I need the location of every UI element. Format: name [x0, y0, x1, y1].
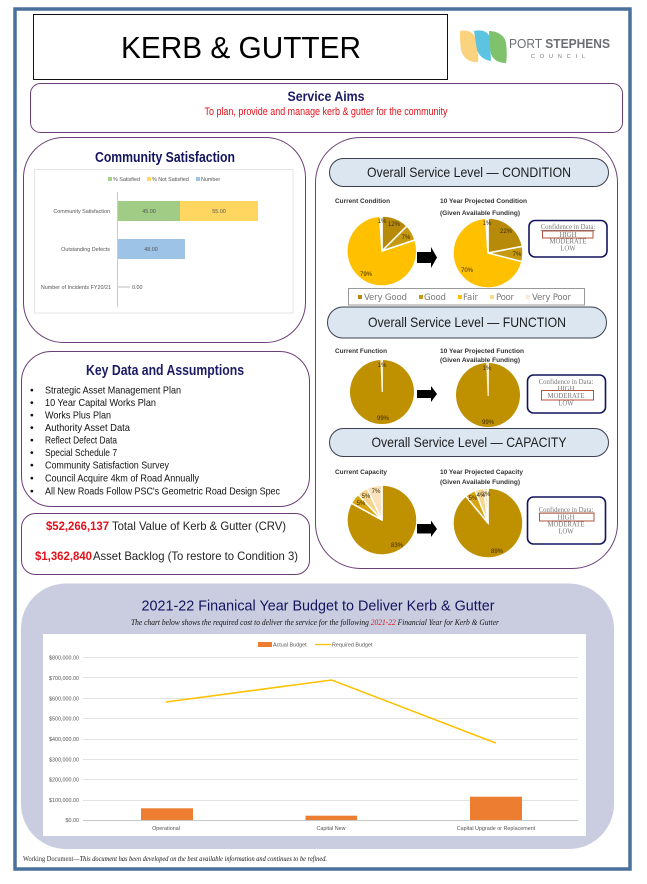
chart: actual vs required budget: $200,000.00 — [49, 778, 79, 784]
heading: condition: Overall Service Level — CONDITION — [367, 164, 571, 180]
callout: confidence in data, capacity: HIGH — [558, 514, 575, 522]
callout: confidence in data, function: MODERATE — [547, 393, 585, 400]
list: key data items: Reflect Defect Data — [45, 434, 117, 446]
callout: confidence in data, function: LOW — [558, 400, 574, 408]
pie chart: current condition: Current Condition — [335, 198, 390, 205]
chart: actual vs required budget: Capital Upgrade or Replacement — [457, 826, 536, 832]
pie chart: projected capacity: 89% — [491, 549, 504, 555]
pie chart: current function: Current Function — [335, 348, 387, 355]
callout: confidence in data, capacity: Confidence in Data: — [539, 507, 593, 514]
panel: asset values: Total Value of Kerb & Gutter (CRV) — [112, 519, 286, 533]
list: key data items: • — [30, 460, 34, 472]
footer note: Working Document—This document has been developed on the best available information and continues to be refined. — [23, 854, 327, 863]
chart: actual vs required budget: $400,000.00 — [49, 737, 79, 743]
bar chart: community satisfaction: 48.00 — [144, 247, 158, 253]
chart: actual vs required budget: $700,000.00 — [49, 676, 79, 682]
list: key data items: Strategic Asset Management Plan — [45, 384, 181, 396]
pie chart: current condition: 79% — [360, 272, 373, 278]
heading: function: Overall Service Level — FUNCTION — [368, 314, 566, 330]
pie chart: current condition: 7% — [402, 235, 411, 241]
chart: actual vs required budget: $500,000.00 — [49, 716, 79, 722]
pie chart: current capacity: 5% — [357, 501, 366, 507]
heading: condition — [330, 158, 608, 186]
panel: community satisfaction — [24, 138, 306, 342]
list: key data items: • — [30, 410, 34, 422]
chart: actual vs required budget: Required Budget — [332, 642, 373, 648]
pie chart: projected capacity: 2% — [482, 492, 491, 498]
pie chart: projected function: 1% — [483, 366, 492, 372]
pie chart: current function — [335, 348, 414, 424]
panel: asset values: Asset Backlog (To restore to Condition 3) — [93, 549, 298, 563]
chart: actual vs required budget: Operational — [152, 826, 180, 832]
pie chart: current capacity — [335, 469, 417, 555]
list: key data items: • — [30, 422, 34, 434]
list: key data items: Authority Asset Data — [45, 422, 130, 434]
chart: actual vs required budget: Capital New — [316, 826, 346, 832]
list: key data items: 10 Year Capital Works Plan — [45, 397, 156, 409]
callout: confidence in data, function — [528, 375, 606, 413]
bar chart: community satisfaction: % Not Satisfied — [152, 177, 189, 183]
callout: confidence in data, function: HIGH — [558, 386, 575, 393]
pie chart: projected function: 10 Year Projected Function — [440, 348, 524, 355]
callout: confidence in data, function: Confidence in Data: — [539, 379, 593, 386]
pie chart: projected condition: 7% — [513, 252, 522, 258]
legend: condition ratings — [348, 288, 584, 305]
legend: condition ratings: Good — [424, 293, 446, 303]
list: key data items: • — [30, 486, 34, 498]
bar chart: community satisfaction: % Satisfied — [113, 177, 140, 183]
pie chart: current capacity: 7% — [372, 489, 381, 495]
panel: service aims: To plan, provide and manage kerb & gutter for the community — [204, 106, 448, 118]
title — [34, 14, 448, 80]
pie chart: current capacity: 83% — [391, 543, 404, 549]
pie chart: projected condition: 70% — [461, 268, 474, 274]
callout: confidence in data, capacity: MODERATE — [547, 522, 585, 528]
heading: key data: Key Data and Assumptions — [86, 363, 244, 379]
pie chart: current function: 1% — [378, 363, 387, 369]
legend: condition ratings: Very Good — [364, 293, 407, 303]
pie chart: projected function — [440, 348, 524, 427]
bar chart: community satisfaction: Number — [201, 177, 220, 183]
pie chart: projected capacity — [440, 469, 523, 558]
arrow: capacity — [417, 520, 437, 537]
bar chart: community satisfaction: Number of Incidents FY20/21 — [41, 285, 111, 291]
arrow: function — [417, 386, 437, 402]
chart: actual vs required budget: $300,000.00 — [49, 758, 79, 764]
title: KERB & GUTTER — [121, 30, 361, 65]
pie chart: projected condition — [440, 198, 527, 288]
pie chart: current function: 99% — [377, 416, 390, 422]
bar chart: community satisfaction: Community Satisfaction — [53, 209, 110, 215]
pie chart: projected capacity: 10 Year Projected Capacity — [440, 469, 523, 476]
callout: confidence in data, condition: Confidence in Data: — [541, 224, 595, 231]
pie chart: projected condition: (Given Available Funding) — [440, 210, 520, 217]
panel: service aims — [30, 84, 622, 132]
pie chart: projected capacity: (Given Available Funding) — [440, 479, 520, 486]
callout: confidence in data, condition: MODERATE — [549, 238, 587, 246]
chart: actual vs required budget: $100,000.00 — [49, 798, 79, 804]
heading: function — [328, 307, 606, 338]
bar chart: community satisfaction: Outstanding Defects — [61, 247, 110, 253]
list: key data items: • — [30, 397, 34, 409]
list: key data items: Works Plus Plan — [45, 410, 111, 422]
list: key data items: Council Acquire 4km of Road Annually — [45, 472, 200, 484]
pie chart: projected condition: 22% — [500, 229, 513, 235]
pie chart: projected function: 99% — [482, 420, 495, 426]
callout: confidence in data, condition — [529, 220, 607, 257]
pie chart: current condition: 1% — [378, 219, 387, 225]
callout: confidence in data, capacity — [528, 497, 606, 544]
pie chart: projected capacity: 4% — [477, 493, 486, 499]
arrow: condition — [417, 247, 437, 268]
heading: community satisfaction: Community Satisfaction — [95, 150, 235, 166]
panel: asset values: $1,362,840 — [35, 549, 92, 563]
panel: asset values: $52,266,137 — [46, 519, 109, 533]
list: key data items — [30, 384, 280, 498]
logo: Port Stephens Council — [460, 30, 610, 63]
chart: actual vs required budget: $600,000.00 — [49, 696, 79, 702]
list: key data items: Special Schedule 7 — [45, 447, 117, 459]
panel: overall service levels — [316, 138, 618, 568]
list: key data items: • — [30, 434, 34, 446]
chart: actual vs required budget: $0.00 — [66, 818, 79, 824]
heading: budget: 2021-22 Finanical Year Budget to Deliver Kerb & Gutter — [142, 598, 494, 614]
logo: Port Stephens Council: COUNCIL — [531, 54, 585, 60]
panel: budget — [21, 584, 614, 849]
pie chart: current condition: 12% — [388, 222, 401, 228]
chart: actual vs required budget: Actual Budget — [273, 642, 307, 648]
callout: confidence in data, condition: LOW — [560, 246, 576, 252]
list: key data items: • — [30, 384, 34, 396]
list: key data items: • — [30, 447, 34, 459]
heading: capacity — [330, 428, 608, 456]
subheading: budget: The chart below shows the required cost to deliver the service for the following 2021-22 Financial Year for Kerb & Gutter — [131, 618, 500, 627]
list: key data items: Community Satisfaction Survey — [45, 460, 170, 472]
bar chart: community satisfaction: 45.00 — [142, 209, 156, 215]
panel: key data and assumptions — [22, 352, 310, 506]
pie chart: projected condition: 1% — [483, 221, 492, 227]
legend: condition ratings: Poor — [496, 293, 514, 303]
bar chart: community satisfaction — [34, 170, 293, 313]
bar chart: community satisfaction: 55.00 — [212, 209, 226, 215]
panel: asset values — [22, 514, 310, 574]
list: key data items: • — [30, 472, 34, 484]
chart: actual vs required budget — [43, 634, 586, 836]
callout: confidence in data, capacity: LOW — [558, 528, 574, 536]
list: key data items: All New Roads Follow PSC's Geometric Road Design Spec — [45, 486, 280, 498]
pie chart: projected function: (Given Available Funding) — [440, 357, 520, 364]
logo: Port Stephens Council: PORT STEPHENS — [509, 37, 610, 51]
callout: confidence in data, condition: HIGH — [560, 232, 577, 239]
pie chart: projected capacity: 5% — [469, 496, 478, 502]
bar chart: community satisfaction: 0.00 — [132, 285, 142, 291]
pie chart: current condition — [335, 198, 417, 286]
heading: capacity: Overall Service Level — CAPACITY — [372, 434, 567, 450]
panel: service aims: Service Aims — [288, 88, 365, 104]
legend: condition ratings: Fair — [463, 293, 478, 303]
pie chart: current capacity: Current Capacity — [335, 469, 387, 476]
pie chart: current capacity: 5% — [362, 494, 371, 500]
legend: condition ratings: Very Poor — [532, 293, 571, 303]
chart: actual vs required budget: $800,000.00 — [49, 656, 79, 662]
pie chart: projected condition: 10 Year Projected Condition — [440, 198, 527, 205]
